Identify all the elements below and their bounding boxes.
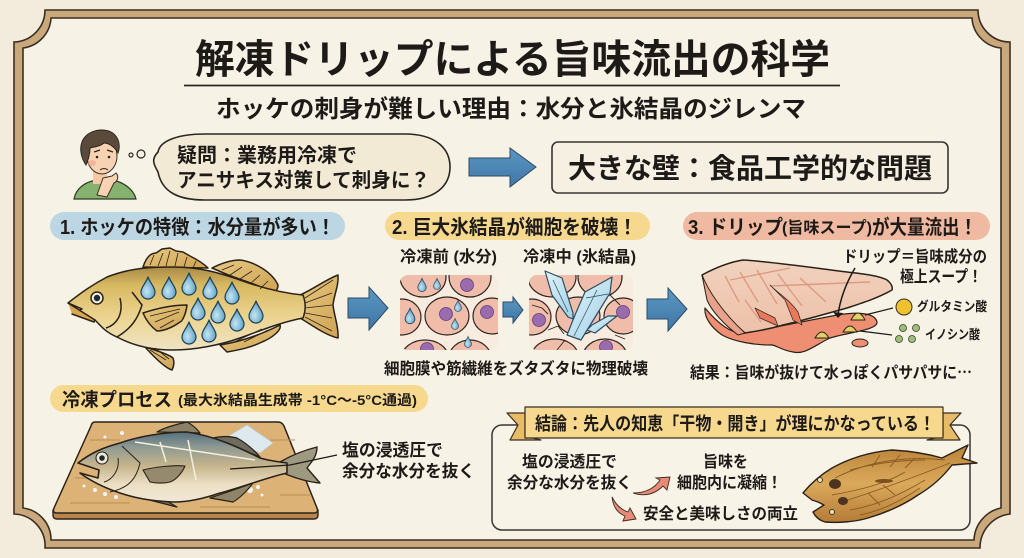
- title: 解凍ドリップによる旨味流出の科学: [195, 38, 830, 82]
- icon: thinking man: [74, 130, 136, 199]
- panel: step 3 heading: (旨味スープ): [782, 219, 872, 237]
- caption: cell destruction: 細胞膜や筋繊維をズタズタに物理破壊: [384, 359, 648, 378]
- question bubble: アニサキス対策して刺身に？: [177, 169, 430, 192]
- text: safety and flavour: 安全と美味しさの両立: [643, 504, 798, 523]
- callout arrow: drip: [833, 268, 855, 318]
- label: during freezing: 冷凍中 (氷結晶): [523, 247, 636, 266]
- panel: step 1 heading: 1. ホッケの特徴：水分量が多い！: [60, 215, 335, 239]
- arrow: [503, 297, 523, 323]
- conclusion ribbon: 結論：先人の知恵「干物・開き」が理にかなっている！: [535, 413, 935, 434]
- annotation: salt osmosis: 余分な水分を抜く: [342, 462, 475, 481]
- callout: drip is soup: 極上スープ！: [900, 267, 982, 286]
- wall box: [552, 142, 948, 193]
- arrow: up right: [633, 477, 670, 495]
- legend: glutamic acid: グルタミン酸: [917, 299, 987, 314]
- text: concentrate umami: 旨味を: [703, 453, 748, 471]
- text: remove water: 塩の浸透圧で: [522, 453, 617, 471]
- result text: 結果：旨味が抜けて水っぽくパサパサに⋯: [690, 363, 972, 382]
- icon: dried opened fish: [803, 445, 977, 522]
- arrow: down right: [612, 497, 636, 521]
- legend: inosinic acid: イノシン酸: [925, 327, 980, 342]
- arrow: [348, 287, 388, 330]
- text: concentrate umami: 細胞内に凝縮！: [677, 473, 782, 492]
- text: remove water: [507, 453, 632, 492]
- annotation: salt osmosis: 塩の浸透圧で: [342, 441, 443, 460]
- conclusion ribbon: [507, 407, 961, 440]
- cells before freezing: [400, 275, 498, 350]
- fish illustration with water drops: [68, 248, 338, 370]
- panel: step 3 heading: [683, 212, 990, 240]
- panel: step 3 heading: が大量流出！: [872, 215, 977, 239]
- label: before freezing: 冷凍前 (水分): [400, 247, 497, 266]
- text: remove water: 余分な水分を抜く: [507, 474, 632, 492]
- panel: step 3 heading: 3. ドリップ: [688, 216, 783, 239]
- freezing process heading: 冷凍プロセス: [62, 389, 172, 411]
- leader line: [230, 455, 337, 469]
- panel: conclusion: [492, 407, 977, 530]
- freezing process heading: (最大氷結晶生成帯 -1°C～-5°C通過): [178, 392, 417, 408]
- cells with ice crystals: [529, 270, 633, 350]
- arrow: [469, 148, 536, 187]
- cutting board with salted fish: [53, 422, 320, 519]
- panel: step 2 heading: 2. 巨大氷結晶が細胞を破壊！: [392, 215, 637, 239]
- freezing process heading: [50, 385, 428, 412]
- legend: inosinic acid: [860, 324, 980, 342]
- question bubble: 疑問：業務用冷凍で: [177, 144, 357, 167]
- wall box: 大きな壁：食品工学的な問題: [568, 153, 932, 184]
- fish fillet with drip: [702, 260, 892, 353]
- icon: thought dots: [129, 150, 145, 158]
- subtitle: ホッケの刺身が難しい理由：水分と氷結晶のジレンマ: [216, 95, 806, 123]
- callout: drip is soup: [843, 247, 987, 286]
- callout: drip is soup: ドリップ＝旨味成分の: [843, 247, 987, 266]
- arrow: [647, 288, 687, 331]
- question bubble: [154, 134, 450, 200]
- text: concentrate umami: [677, 453, 782, 492]
- annotation: salt osmosis: [342, 441, 475, 481]
- legend: glutamic acid: [865, 299, 987, 315]
